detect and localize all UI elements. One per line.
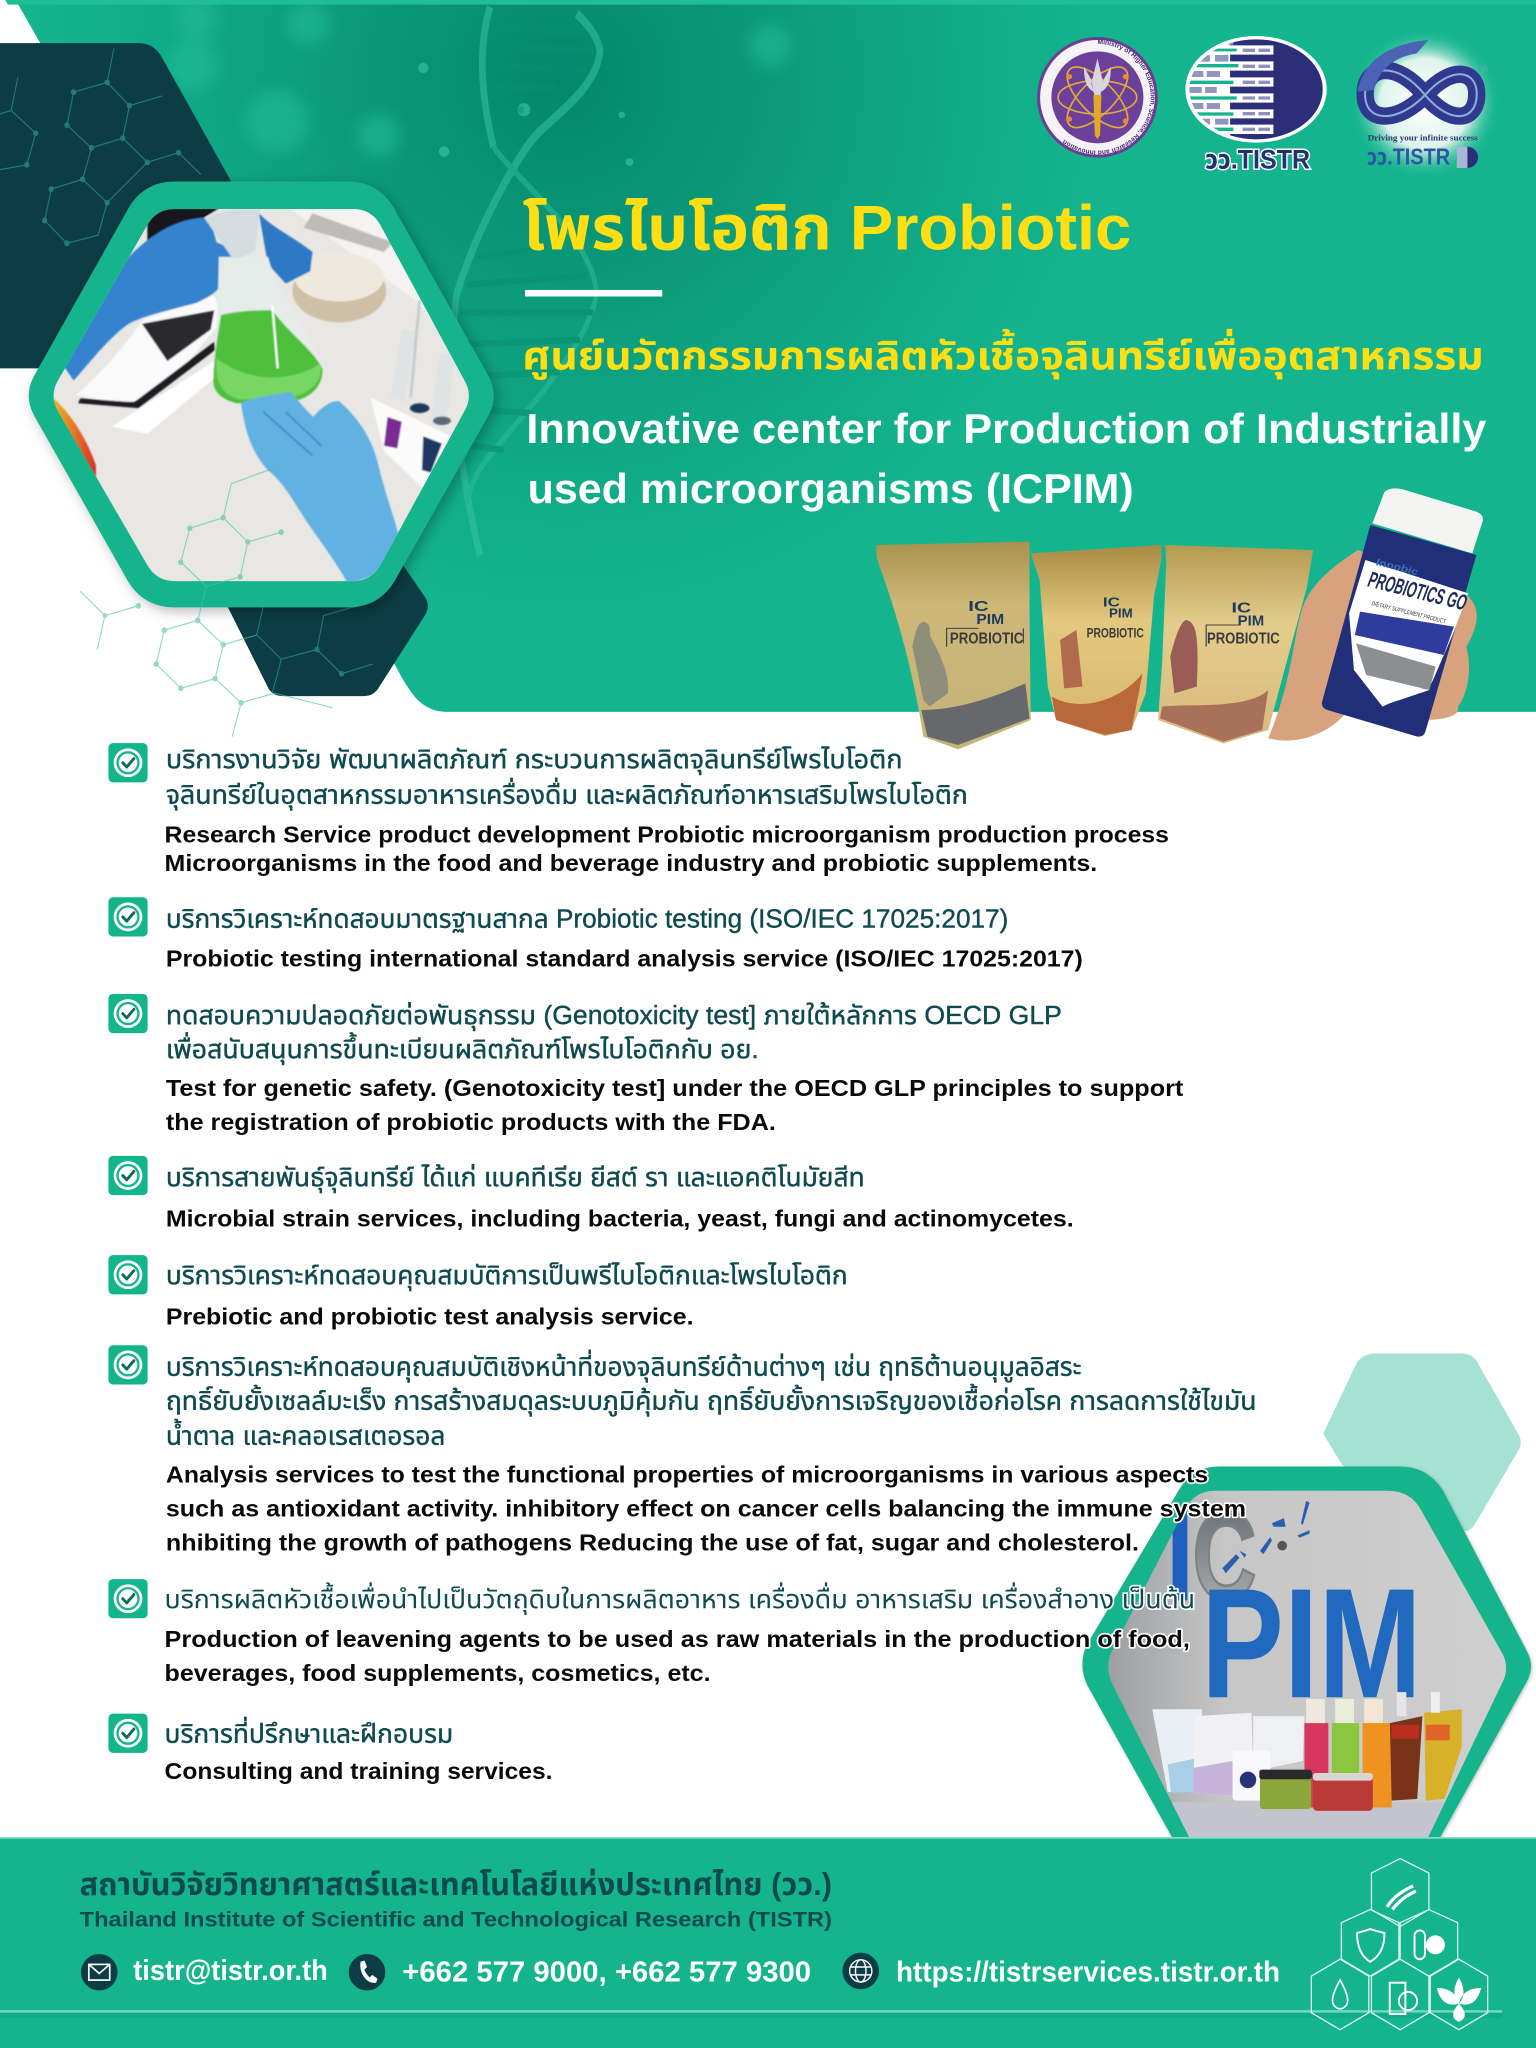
icon: capsule xyxy=(1415,1930,1444,1959)
list item 6: functional properties: such as antioxidant activity. inhibitory effect on cancer cells balancing the immune system xyxy=(166,1495,1246,1521)
list item 3: genotoxicity test: Test for genetic safety. (Genotoxicity test] under the OECD GLP principles to support xyxy=(166,1075,1184,1101)
logo: 60th anniversary: Driving your infinite success xyxy=(1368,134,1478,143)
bag: Lactobacillus: PIM xyxy=(1238,613,1264,629)
logo: ministry seal: Ministry of Higher Education, Science, Research and Innovation xyxy=(1063,39,1156,156)
bag: Lactobacillus xyxy=(1158,545,1313,743)
check icon xyxy=(108,994,148,1033)
background: faint DNA helix xyxy=(453,7,600,556)
list item 1: research service: บริการงานวิจัย พัฒนาผลิตภัณฑ์ กระบวนการผลิตจุลินทรีย์โพรไบโอติก xyxy=(166,746,903,775)
icon: flower xyxy=(1437,1977,1481,2022)
check icon xyxy=(108,743,148,782)
photo: ICPIM sign and products xyxy=(1103,1487,1513,1840)
logo: TISTR xyxy=(1185,36,1330,174)
icon: globe xyxy=(842,1953,879,1989)
icon: envelope xyxy=(81,1954,118,1991)
panel: footer background xyxy=(0,1837,1536,2048)
footer organisation name xyxy=(80,1867,832,1932)
list item 2: probiotic testing: บริการวิเคราะห์ทดสอบมาตรฐานสากล Probiotic testing (ISO/IEC 17025:2017) xyxy=(166,905,1008,933)
list item 8: consulting and training xyxy=(108,1714,552,1784)
bag: Lactobacillus: PROBIOTIC xyxy=(1207,629,1280,647)
panel: dark hexagon lower xyxy=(227,522,428,696)
list item 8: consulting and training: Consulting and training services. xyxy=(165,1758,552,1784)
subtitle English: used microorganisms (ICPIM) xyxy=(528,465,1134,512)
subtitle English: Innovative center for Production of Industrially xyxy=(526,405,1487,452)
check icon xyxy=(108,1345,148,1384)
list item 3: genotoxicity test: ทดสอบความปลอดภัยต่อพันธุกรรม (Genotoxicity test] ภายใต้หลักการ OECD GLP xyxy=(166,1002,1062,1031)
list item 6: functional properties: ฤทธิ์ยับยั้งเซลล์มะเร็ง การสร้างสมดุลระบบภูมิคุ้มกัน ฤทธิ์ยับยั้งการเจริญของเชื้อก่อโรค การลดการใช้ไขมัน xyxy=(166,1383,1256,1416)
decoration: molecule mesh on dark hexagons xyxy=(0,48,373,693)
list item 8: consulting and training: บริการที่ปรึกษาและฝึกอบรม xyxy=(165,1716,453,1748)
list item 7: starter culture production: บริการผลิตหัวเชื้อเพื่อนำไปเป็นวัตถุดิบในการผลิตอาหาร เครื่องดื่ม อาหารเสริม เครื่องสำอาง เป็นต้น xyxy=(165,1582,1195,1615)
bottle: DIETARY SUPPLEMENT PRODUCT xyxy=(1370,601,1447,625)
logo: TISTR: วว.TISTR xyxy=(1205,144,1310,174)
icon: phone xyxy=(349,1954,385,1991)
decoration: molecule mesh over white area xyxy=(80,465,333,737)
photo: ICPIM sign and products: IC xyxy=(1168,1487,1257,1626)
bag: Enterococcus xyxy=(1031,545,1161,736)
list item 3: genotoxicity test: the registration of probiotic products with the FDA. xyxy=(166,1109,776,1135)
list item 1: research service: Research Service product development Probiotic microorganism production process xyxy=(165,821,1169,847)
list item 6: functional properties: nhibiting the growth of pathogens Reducing the use of fat, sugar and cholesterol. xyxy=(166,1529,1139,1555)
list item 4: microbial strains: Microbial strain services, including bacteria, yeast, fungi and actinomycetes. xyxy=(166,1205,1074,1231)
list item 5: prebiotic and probiotic analysis xyxy=(108,1255,848,1329)
logo: 60th anniversary: th xyxy=(1482,65,1488,74)
list item 4: microbial strains: บริการสายพันธุ์จุลินทรีย์ ได้แก่ แบคทีเรีย ยีสต์ รา และแอคติโนมัยสีท xyxy=(166,1164,865,1193)
icon: shield xyxy=(1357,1929,1384,1962)
list item 2: probiotic testing: Probiotic testing international standard analysis service (ISO/IEC 17025:2017) xyxy=(166,946,1083,972)
bag: Enterococcus: PIM xyxy=(1109,607,1133,621)
list item 3: genotoxicity test xyxy=(108,994,1184,1135)
footer organisation name: สถาบันวิจัยวิทยาศาสตร์และเทคโนโลยีแห่งประเทศไทย (วว.) xyxy=(80,1867,832,1902)
footer organisation name: Thailand Institute of Scientific and Technological Research (TISTR) xyxy=(80,1907,832,1932)
check icon xyxy=(108,1714,148,1753)
icon: bottle with star xyxy=(1390,1983,1417,2014)
list item 6: functional properties: Analysis services to test the functional properties of microorganisms in various aspects xyxy=(166,1461,1208,1487)
photo: gloved hands holding a green flask xyxy=(54,209,469,582)
logo: 60th anniversary xyxy=(1350,28,1500,178)
bag: Enterococcus: IC xyxy=(1103,596,1120,610)
hand holding bottle xyxy=(1268,550,1477,741)
bag: Bifidobacterium xyxy=(876,542,1031,749)
check icon xyxy=(108,897,148,936)
list item 7: starter culture production: beverages, food supplements, cosmetics, etc. xyxy=(165,1660,711,1686)
contact: phone: +662 577 9000, +662 577 9300 xyxy=(402,1956,811,1988)
logo: 60th anniversary: วว.TISTR xyxy=(1367,143,1450,169)
photo: ICPIM sign and products: PIM xyxy=(1201,1557,1422,1731)
list item 5: prebiotic and probiotic analysis: Prebiotic and probiotic test analysis service. xyxy=(166,1303,694,1329)
list item 6: functional properties xyxy=(108,1345,1256,1555)
icon: droplet xyxy=(1332,1980,1348,2009)
bottle xyxy=(1322,488,1483,737)
panel: ICPIM photo hexagon xyxy=(1082,1466,1531,1840)
panel: lab photo hexagon frame xyxy=(29,182,494,607)
list item 5: prebiotic and probiotic analysis: บริการวิเคราะห์ทดสอบคุณสมบัติการเป็นพรีไบโอติกและโพรไบโอติก xyxy=(166,1262,848,1291)
check icon xyxy=(108,1255,148,1294)
check icon xyxy=(108,1579,148,1618)
list item 7: starter culture production xyxy=(108,1579,1195,1686)
list item 1: research service: Microorganisms in the food and beverage industry and probiotic supplements. xyxy=(165,850,1097,876)
bag: Bifidobacterium: IC xyxy=(968,598,989,615)
contact: email xyxy=(81,1954,328,1991)
title: โพรไบโอติก Probiotic xyxy=(522,193,1131,263)
subtitle English xyxy=(526,405,1487,512)
bottle: Innobic xyxy=(1374,557,1420,578)
panel: dark hexagon top left xyxy=(0,43,303,368)
contact: website: https://tistrservices.tistr.or.th xyxy=(896,1956,1280,1988)
list item 1: research service xyxy=(108,743,1169,876)
list item 1: research service: จุลินทรีย์ในอุตสาหกรรมอาหารเครื่องดื่ม และผลิตภัณฑ์อาหารเสริมโพรไบโอติก xyxy=(166,777,968,810)
divider rule under title xyxy=(525,290,662,296)
hexagon frame xyxy=(1082,1466,1531,1838)
bag: Bifidobacterium: PROBIOTIC xyxy=(950,629,1023,647)
icon cluster: hexagons with science icons xyxy=(1311,1859,1488,2030)
subtitle Thai: ศูนย์นวัตกรรมการผลิตหัวเชื้อจุลินทรีย์เพื่ออุตสาหกรรม xyxy=(522,329,1484,380)
check icon xyxy=(108,1156,148,1195)
list item 2: probiotic testing xyxy=(108,897,1083,972)
bag: Lactobacillus: IC xyxy=(1232,600,1251,616)
panel: green header background xyxy=(5,0,1536,712)
bag: Bifidobacterium: PIM xyxy=(976,611,1004,628)
list item 3: genotoxicity test: เพื่อสนับสนุนการขึ้นทะเบียนผลิตภัณฑ์โพรไบโอติกกับ อย. xyxy=(166,1032,759,1065)
list item 6: functional properties: น้ำตาล และคลอเรสเตอรอล xyxy=(166,1419,445,1451)
list item 4: microbial strains xyxy=(108,1156,1074,1231)
list item 6: functional properties: บริการวิเคราะห์ทดสอบคุณสมบัติเชิงหน้าที่ของจุลินทรีย์ด้านต่างๆ เช่น ฤทธิต้านอนุมูลอิสระ xyxy=(166,1349,1081,1382)
contact: email: tistr@tistr.or.th xyxy=(133,1955,328,1987)
icon: DNA xyxy=(1387,1886,1416,1910)
decoration: mint hexagon xyxy=(1323,1354,1521,1531)
bag: Enterococcus: PROBIOTIC xyxy=(1087,626,1144,641)
product photo: gold bags and probiotic bottle in hand xyxy=(876,488,1483,749)
list item 7: starter culture production: Production of leavening agents to be used as raw materials in the production of food, xyxy=(165,1626,1190,1652)
